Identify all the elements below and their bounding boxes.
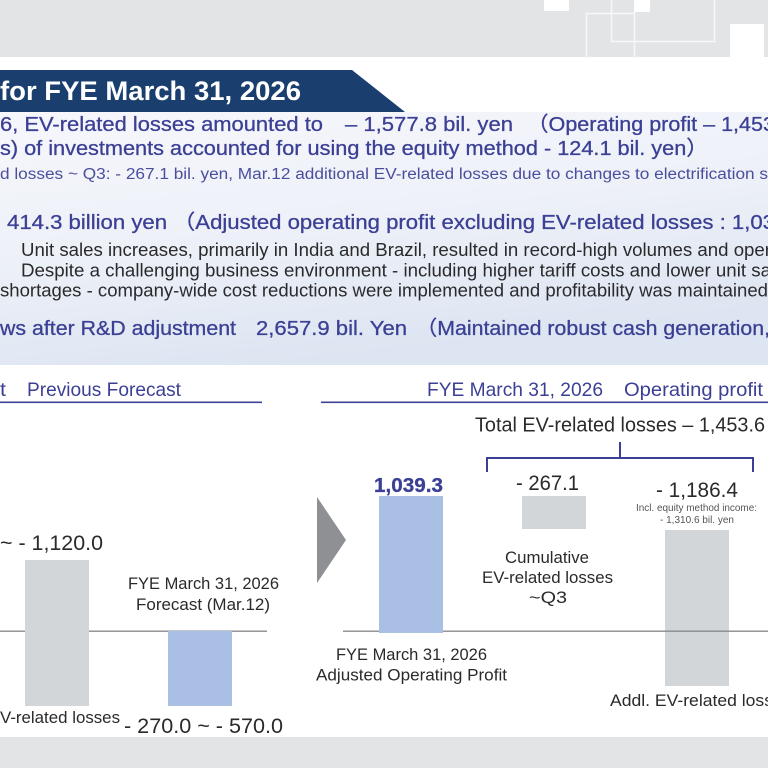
bar: additional EV-related losses	[665, 530, 729, 686]
bar label: adjusted operating profit: FYE March 31, 2026	[336, 645, 487, 664]
bar label: adjusted operating profit	[316, 645, 507, 684]
footer band	[0, 737, 768, 768]
equity method line: s) of investments accounted for using the equity method - 124.1 bil. yen）	[0, 137, 708, 160]
left chart axis	[0, 630, 267, 632]
bar: operating profit forecast	[168, 631, 232, 706]
title banner: for FYE March 31, 2026	[0, 76, 301, 106]
forecast label: Forecast (Mar.12)	[136, 595, 270, 614]
bar label: cumulative EV-related losses	[482, 548, 613, 607]
bar label: cumulative EV-related losses: Cumulative	[505, 548, 589, 567]
right chart heading	[321, 379, 768, 403]
EV-related losses amount: – 1,577.8 bil. yen	[345, 113, 513, 136]
equity method note	[636, 503, 757, 526]
cash flow amount: 2,657.9 bil. Yen	[256, 317, 407, 340]
bar value: additional EV-related losses: - 1,186.4	[656, 479, 738, 502]
total EV-related losses label: Total EV-related losses – 1,453.6	[475, 414, 765, 436]
explanation line 2: Despite a challenging business environment - including higher tariff costs and lower unit sa	[21, 260, 768, 280]
bar value: operating profit forecast: - 270.0 ~ - 570.0	[124, 715, 283, 738]
right chart axis	[343, 630, 768, 632]
header band	[0, 0, 768, 58]
panel: previous forecast	[0, 379, 283, 738]
equity method note: Incl. equity method income:	[636, 503, 757, 514]
cash flow note: （Maintained robust cash generation,	[416, 317, 768, 340]
bar label: cumulative EV-related losses: ~Q3	[529, 588, 567, 607]
title banner	[0, 70, 405, 112]
panel: operating profit	[316, 379, 768, 710]
bracket	[487, 442, 753, 472]
operating profit headline: 414.3 billion yen （Adjusted operating profit excluding EV-related losses : 1,03	[7, 211, 768, 234]
bar value: cumulative EV-related losses: - 267.1	[516, 472, 579, 495]
forecast label: FYE March 31, 2026	[128, 574, 279, 593]
bar: EV-related losses forecast	[25, 560, 89, 706]
losses detail line: d losses ~ Q3: - 267.1 bil. yen, Mar.12 additional EV-related losses due to changes to electrification s	[0, 166, 768, 183]
EV-related losses line: 6, EV-related losses amounted to	[0, 113, 323, 136]
bar label: EV-related losses: V-related losses	[0, 708, 120, 727]
forecast label	[128, 574, 279, 614]
explanation line 1: Unit sales increases, primarily in India and Brazil, resulted in record-high volumes and oper	[21, 240, 768, 260]
right chart heading: Operating profit	[624, 379, 764, 401]
operating profit amount: （Operating profit – 1,453	[527, 113, 768, 136]
bar value: adjusted operating profit: 1,039.3	[374, 474, 443, 497]
right chart heading: FYE March 31, 2026	[427, 379, 603, 401]
equity method note: - 1,310.6 bil. yen	[660, 515, 734, 526]
bar label: cumulative EV-related losses: EV-related losses	[482, 568, 613, 587]
summary panel	[0, 112, 768, 365]
bar: cumulative EV-related losses	[522, 496, 586, 529]
bar value: EV-related losses forecast: ~ - 1,120.0	[0, 532, 103, 555]
bar: adjusted operating profit	[379, 496, 443, 633]
left chart heading	[0, 379, 262, 403]
left chart heading: Previous Forecast	[27, 379, 182, 401]
arrow	[317, 497, 346, 583]
bar label: adjusted operating profit: Adjusted Operating Profit	[316, 666, 507, 684]
left chart heading: t	[0, 379, 7, 401]
bar label: additional EV-related losses: Addl. EV-related loss	[610, 691, 768, 710]
cash flow label: ws after R&D adjustment	[0, 317, 236, 340]
explanation line 3: shortages - company-wide cost reductions were implemented and profitability was maintained	[0, 280, 768, 300]
